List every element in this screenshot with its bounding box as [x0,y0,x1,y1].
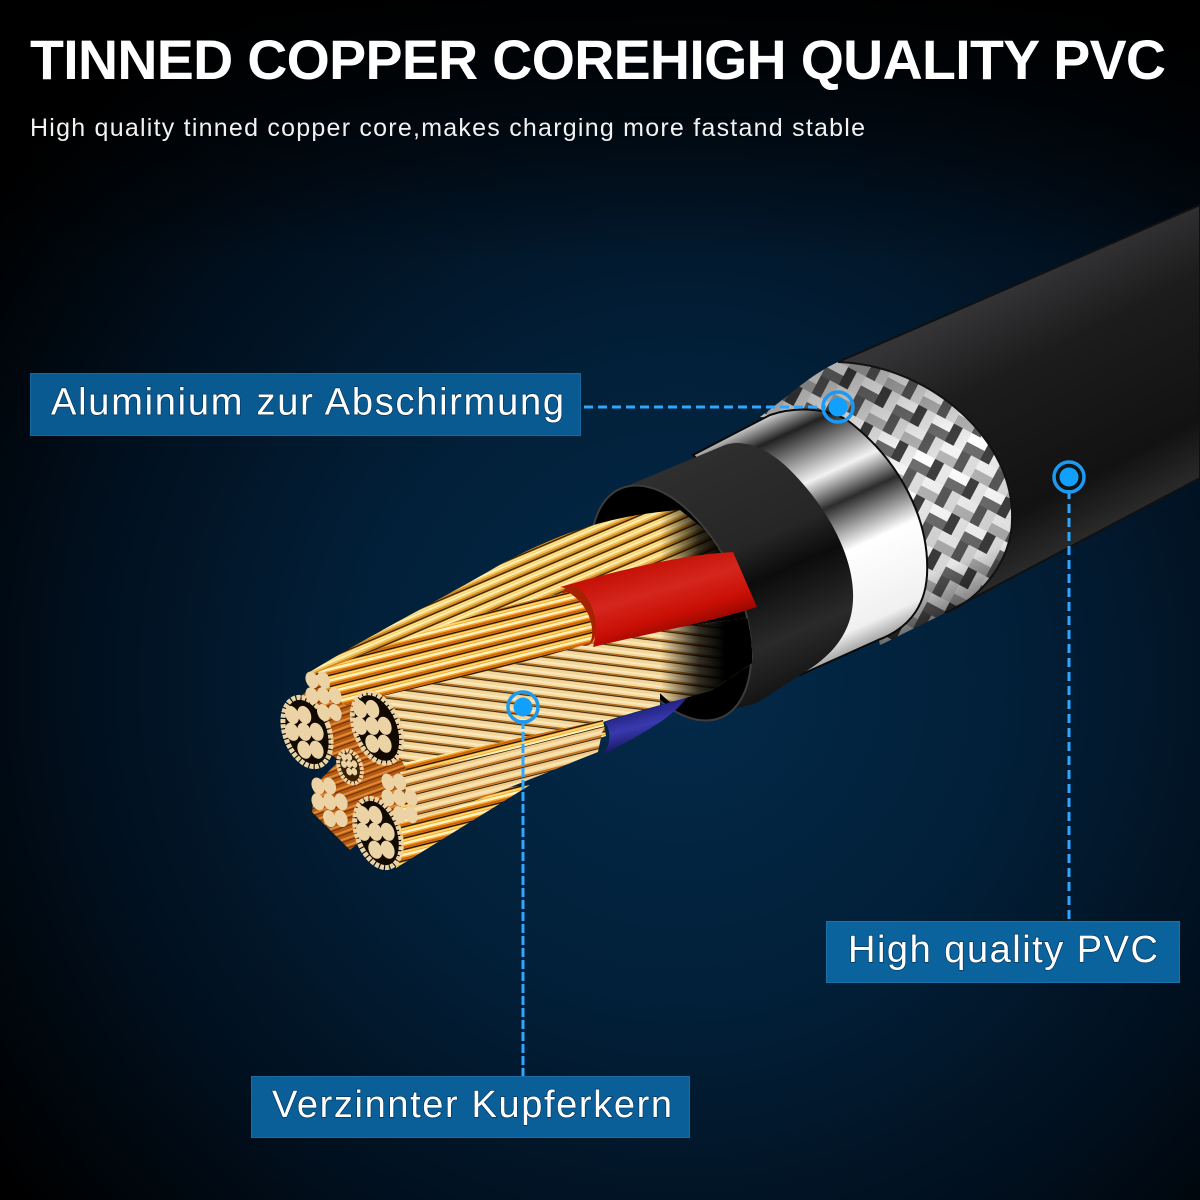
leader line [522,720,524,1076]
outer PVC jacket [838,205,1200,613]
small centre conductor end [334,747,366,787]
red insulated conductor [553,552,757,650]
label: Aluminium zur Abschirmung [51,382,564,424]
label: High quality PVC [848,929,1158,971]
cable illustration [274,205,1200,874]
inner black sheath [617,443,853,718]
bare strands from red conductor [318,592,592,705]
bottom conductor end [346,792,410,874]
marker [1054,462,1084,492]
central gold bundle [355,617,757,763]
central conductor end [343,685,411,771]
label: Verzinnter Kupferkern [272,1084,672,1126]
copper core [298,678,442,850]
lower gold bundle [400,726,605,820]
marker [508,692,538,722]
right cluster [379,772,420,825]
label [252,1076,690,1138]
marker [823,392,853,422]
leader line [584,406,826,408]
blue insulated conductor [603,697,687,755]
leader line [1068,490,1070,920]
callout: aluminium shield [30,374,853,436]
left conductor end [274,691,340,773]
callout: PVC jacket [826,462,1180,982]
upper gold bundle [308,510,757,705]
subtitle: High quality tinned copper core,makes charging more fastand stable [30,114,865,142]
strand backing between bundles [403,720,606,795]
bottom strand cone [392,785,530,868]
lower left cluster [309,776,350,829]
silver foil band [693,410,927,675]
top small cluster [303,670,344,723]
strand cross sections [274,670,420,874]
sheath opening [558,461,784,745]
braided aluminium shield [760,362,1012,645]
label [30,374,580,436]
callout: tinned copper core [252,692,690,1138]
label [826,922,1180,982]
title: TINNED COPPER COREHIGH QUALITY PVC [30,29,1166,91]
